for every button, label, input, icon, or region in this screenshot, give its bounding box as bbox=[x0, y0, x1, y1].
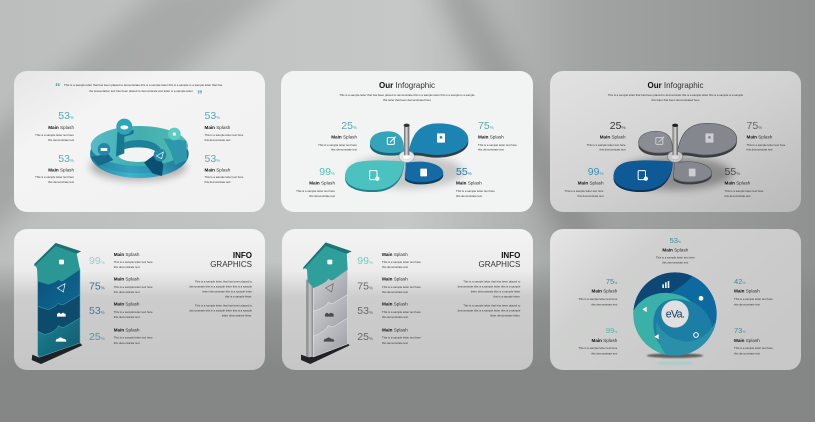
swirl: top navy bbox=[633, 272, 692, 312]
stat: 55% bbox=[724, 166, 764, 198]
body text bbox=[458, 279, 521, 318]
stat: 99%: Main Splash bbox=[309, 180, 335, 186]
stat row: 99%: this demonstrate text bbox=[114, 265, 140, 269]
body text: letter demonstrate letter. bbox=[222, 314, 252, 318]
stat row: 53%: this demonstrate text bbox=[114, 315, 140, 319]
stat row: 25%: this demonstrate text bbox=[114, 341, 140, 345]
stat: 99%: 99% bbox=[319, 166, 335, 178]
tower side bbox=[306, 280, 314, 357]
stat: 42%: this demonstrate text bbox=[734, 302, 760, 306]
tower segment: people bbox=[38, 293, 80, 335]
heading: info graphics: GRAPHICS bbox=[479, 260, 520, 269]
stat: 25%: Main Splash bbox=[331, 134, 357, 140]
stat: 99%: This is a sample letter text here bbox=[578, 346, 618, 350]
heading: info graphics: INFO bbox=[501, 251, 520, 260]
stat: 99%: Main Splash bbox=[592, 338, 618, 343]
stat row: 75%: 75% bbox=[89, 280, 105, 292]
quote text: “ bbox=[55, 82, 60, 94]
petal: top left gray bbox=[638, 131, 673, 153]
stat row: 53% bbox=[89, 302, 153, 319]
stat: bottom left 53% bbox=[35, 153, 74, 184]
pin pole bbox=[672, 124, 678, 155]
petal chart gray bbox=[613, 123, 737, 192]
stat row: 75%: this demonstrate text bbox=[382, 290, 408, 294]
stat: bottom right 53%: This is a sample letter text here bbox=[204, 175, 244, 179]
stat row: 99%: 99% bbox=[357, 255, 373, 267]
stat: bottom right 53%: Main Splash bbox=[204, 168, 231, 172]
icon: bars bbox=[662, 281, 669, 288]
title: Our Infographic bbox=[647, 81, 704, 90]
panel: tower infographic teal bbox=[14, 229, 265, 370]
stat: 75%: this demonstrate text bbox=[746, 148, 773, 152]
stat row: 99%: 99% bbox=[89, 255, 105, 267]
tower segment: plane bbox=[38, 269, 80, 310]
stat: 75% bbox=[578, 277, 618, 306]
petal: top right gray bbox=[677, 123, 737, 155]
stat: top right 53%: 53% bbox=[204, 110, 220, 122]
stat row: 75%: This is a sample letter text here bbox=[114, 285, 153, 289]
petal chart teal bbox=[345, 123, 468, 192]
stat row: 75% bbox=[89, 276, 153, 294]
stat: 75%: 75% bbox=[606, 277, 617, 286]
icon: refresh bbox=[694, 333, 698, 337]
title: Our Infographic bbox=[379, 81, 435, 90]
body text: This is a sample letter that has been placed to bbox=[195, 279, 252, 283]
stat: 73%: 73% bbox=[734, 326, 745, 335]
quote text bbox=[55, 82, 223, 101]
quote text: the presentation text has been placed to demonstrate text letter is a sample letter bbox=[89, 89, 193, 93]
stat: top 53%: 53% bbox=[670, 236, 681, 245]
stat row: 25%: 25% bbox=[357, 331, 373, 343]
petal: bottom right gray bbox=[673, 162, 712, 182]
stat row: 75%: This is a sample letter text here bbox=[382, 285, 421, 289]
subtitle bbox=[339, 93, 475, 102]
stat: top left 53%: This is a sample letter text here bbox=[35, 133, 74, 137]
quote text: This is a sample letter that has been placed to demonstrate this is a sample letter this is a sample is a sample letter that has bbox=[64, 83, 223, 87]
stat: 25% bbox=[318, 120, 357, 152]
stat row: 75%: this demonstrate text bbox=[114, 290, 140, 294]
swirl: bottom teal blue bbox=[656, 322, 716, 356]
stat: 75%: this demonstrate text bbox=[591, 302, 618, 306]
stat: bottom left 53%: Main Splash bbox=[48, 168, 74, 172]
stat: 75%: Main Splash bbox=[478, 134, 504, 140]
stat: 42% bbox=[734, 277, 773, 306]
stat: 42%: This is a sample letter text here bbox=[734, 297, 773, 301]
subtitle: this letter that been demonstrated here bbox=[651, 98, 700, 102]
stat: 55%: 55% bbox=[724, 166, 740, 178]
stat: 99% bbox=[565, 166, 604, 198]
pin pole bbox=[404, 124, 410, 155]
subtitle: this letter that been demonstrated here bbox=[383, 98, 431, 102]
stat: 42%: 42% bbox=[734, 277, 745, 286]
stat: 99%: this demonstrate text bbox=[309, 194, 335, 198]
stat row: 25% bbox=[89, 328, 153, 345]
pin base bbox=[399, 151, 414, 162]
subtitle: This is a sample letter that has been placed to demonstrate this is a sample letter this is a sample is a sample bbox=[608, 93, 744, 97]
petal: bottom right navy bbox=[405, 162, 443, 182]
stat row: 25%: This is a sample letter text here bbox=[114, 336, 153, 340]
icon: document bbox=[705, 133, 713, 143]
stat: top right 53% bbox=[204, 110, 244, 142]
body text: demonstrate this is a sample letter this is a sample bbox=[189, 309, 252, 313]
swirl: left teal bbox=[632, 293, 691, 358]
stat row: 53%: 53% bbox=[357, 305, 373, 317]
icon: edit bbox=[387, 137, 396, 144]
stat row: 99%: This is a sample letter text here bbox=[114, 260, 153, 264]
tower segment: roof bbox=[34, 243, 81, 285]
body text: letter demonstrate letter. bbox=[490, 314, 521, 318]
body text: letter demonstrate this is a sample letter bbox=[471, 289, 520, 293]
spiral chart bbox=[632, 270, 722, 365]
stat: bottom right 53%: this demonstrate text bbox=[204, 180, 231, 184]
panel: tower infographic gray bbox=[282, 229, 533, 370]
stat: 75%: This is a sample letter text here bbox=[578, 297, 618, 301]
stat: bottom left 53%: 53% bbox=[58, 153, 74, 165]
stat row: 25%: Main Splash bbox=[114, 328, 140, 332]
icon: globe bbox=[699, 296, 703, 301]
icon: people pin bbox=[98, 143, 110, 156]
stat: 55%: this demonstrate text bbox=[456, 194, 482, 198]
body text: This is a sample letter that has been placed to bbox=[463, 279, 521, 283]
tower chart bbox=[301, 242, 352, 364]
stat: top 53%: this demonstrate text bbox=[662, 261, 688, 265]
petal: top left teal bbox=[370, 131, 404, 153]
stat: bottom left 53%: this demonstrate text bbox=[48, 180, 74, 184]
stat row: 99%: Main Splash bbox=[114, 252, 140, 257]
swirl: right blue bbox=[670, 276, 717, 331]
stat row: 75%: Main Splash bbox=[382, 276, 408, 282]
stat: 55%: 55% bbox=[456, 166, 472, 178]
subtitle: This is a sample letter that has been placed to demonstrate this is a sample letter this is a sample is a sample bbox=[339, 93, 475, 97]
panel: ring infographic bbox=[14, 71, 265, 212]
stat row: 99% bbox=[357, 252, 421, 269]
stat row: 25%: This is a sample letter text here bbox=[382, 336, 421, 340]
stat: 42%: Main Splash bbox=[734, 288, 760, 294]
body text bbox=[189, 279, 252, 318]
body text: demonstrate this is a sample letter this is a sample bbox=[458, 309, 521, 313]
stat: 25% bbox=[587, 120, 626, 152]
stat: 75%: Main Splash bbox=[592, 288, 618, 294]
stat row: 53%: This is a sample letter text here bbox=[114, 310, 153, 314]
stat: 99%: 99% bbox=[606, 326, 617, 335]
stat row: 99%: Main Splash bbox=[382, 252, 408, 257]
heading: info graphics bbox=[479, 251, 520, 269]
stat row: 75%: 75% bbox=[357, 280, 373, 292]
stat row: 53%: this demonstrate text bbox=[382, 315, 408, 319]
petal: top right blue bbox=[408, 123, 468, 155]
tower segment: plane bbox=[313, 269, 348, 311]
stat: 75% bbox=[478, 120, 517, 152]
tower segment: roof bbox=[303, 242, 352, 288]
body text: letter demonstrate this is a sample letter bbox=[202, 289, 252, 293]
petal: bottom left aqua bbox=[345, 160, 404, 190]
stat: 25%: This is a sample letter text here bbox=[587, 143, 626, 147]
stat: top right 53%: This is a sample letter text here bbox=[204, 133, 244, 137]
logo: eVa. bbox=[666, 309, 684, 321]
body text: demonstrate this is a sample letter this is a sample bbox=[458, 284, 521, 288]
stat: top left 53%: this demonstrate text bbox=[48, 138, 74, 142]
stat: bottom right 53% bbox=[204, 153, 244, 184]
body text: this is a sample letter. bbox=[225, 294, 252, 298]
stat: 75%: this demonstrate text bbox=[478, 148, 504, 152]
icon: speaker bbox=[643, 307, 646, 312]
stat row: 75%: Main Splash bbox=[114, 276, 140, 282]
stat: 75%: 75% bbox=[478, 120, 494, 132]
petal: bottom left navy bbox=[613, 160, 673, 190]
heading: info graphics bbox=[210, 251, 252, 269]
stat: 55%: Main Splash bbox=[456, 180, 482, 186]
stat: 75%: This is a sample letter text here bbox=[746, 143, 786, 147]
stat: 99%: This is a sample letter text here bbox=[296, 189, 335, 193]
icon: clipboard bbox=[638, 171, 647, 180]
stat: 25%: Main Splash bbox=[600, 134, 626, 140]
stat: 99%: This is a sample letter text here bbox=[565, 189, 604, 193]
stat: 25%: this demonstrate text bbox=[331, 148, 357, 152]
stat row: 25%: this demonstrate text bbox=[382, 341, 408, 345]
stat: top 53%: This is a sample letter text here bbox=[656, 255, 695, 259]
stat: 25%: this demonstrate text bbox=[600, 148, 626, 152]
stat: 99%: this demonstrate text bbox=[591, 351, 618, 355]
stat row: 99%: this demonstrate text bbox=[382, 265, 408, 269]
stat row: 53%: Main Splash bbox=[114, 302, 140, 306]
icon: cloud pin bbox=[116, 119, 132, 135]
stat: top left 53% bbox=[35, 110, 74, 142]
stat: 75%: This is a sample letter text here bbox=[478, 143, 517, 147]
icon: note bbox=[420, 169, 427, 176]
stat: 55%: Main Splash bbox=[724, 180, 751, 186]
stat: 99% bbox=[578, 326, 618, 355]
tower segment: people bbox=[313, 293, 348, 336]
body text: this is a sample letter. bbox=[493, 294, 521, 298]
stat row: 25%: 25% bbox=[89, 331, 105, 343]
subtitle bbox=[608, 93, 744, 102]
ring chart bbox=[90, 119, 189, 181]
heading: info graphics: GRAPHICS bbox=[210, 260, 252, 269]
icon: clipboard bbox=[370, 171, 379, 180]
tower segment: cloud bbox=[38, 316, 80, 357]
stat: 75% bbox=[746, 120, 786, 152]
stat: top right 53%: Main Splash bbox=[204, 125, 231, 130]
stat: 55%: This is a sample letter text here bbox=[724, 189, 764, 193]
stat: 73%: This is a sample letter text here bbox=[734, 346, 773, 350]
stat: top 53%: Main Splash bbox=[662, 248, 689, 252]
stat: 25%: 25% bbox=[610, 120, 626, 132]
stat: bottom right 53%: 53% bbox=[204, 153, 220, 165]
stat: 73%: this demonstrate text bbox=[734, 351, 760, 355]
stat row: 25%: Main Splash bbox=[382, 328, 408, 332]
stat: top 53% bbox=[656, 236, 695, 265]
body text: demonstrate this is a sample letter this is a sample bbox=[189, 284, 252, 288]
tower chart bbox=[32, 243, 82, 364]
stat row: 53%: Main Splash bbox=[382, 302, 408, 306]
panel: spiral infographic bbox=[550, 229, 801, 370]
stat: 55% bbox=[456, 166, 495, 198]
stat: 99%: this demonstrate text bbox=[578, 194, 604, 198]
icon: speaker mute bbox=[655, 335, 658, 339]
stat row: 53% bbox=[357, 302, 421, 319]
body text: This is a sample letter that has been placed to bbox=[195, 303, 252, 307]
tower base bbox=[32, 343, 82, 364]
heading: info graphics: INFO bbox=[233, 251, 252, 260]
stat: 55%: This is a sample letter text here bbox=[456, 189, 495, 193]
icon: note bbox=[689, 169, 695, 176]
stat row: 53%: 53% bbox=[89, 305, 105, 317]
stat: 25%: This is a sample letter text here bbox=[318, 143, 357, 147]
stat row: 99% bbox=[89, 252, 153, 269]
panel: petal infographic teal bbox=[281, 71, 533, 212]
tower segment: cloud bbox=[313, 317, 348, 357]
stat: top right 53%: this demonstrate text bbox=[204, 138, 231, 142]
stat: 25%: 25% bbox=[341, 120, 357, 132]
icon: plane pin bbox=[154, 149, 166, 161]
stat: 73%: Main Splash bbox=[734, 338, 760, 343]
panel: petal infographic gray bbox=[550, 71, 801, 212]
stat row: 75% bbox=[357, 276, 421, 294]
icon: edit bbox=[656, 137, 664, 144]
stat: bottom left 53%: This is a sample letter text here bbox=[35, 175, 74, 179]
stat: 99%: 99% bbox=[588, 166, 604, 178]
stat row: 25% bbox=[357, 328, 421, 345]
stat row: 53%: This is a sample letter text here bbox=[382, 310, 421, 314]
stat: 55%: this demonstrate text bbox=[724, 194, 751, 198]
stat: top left 53%: Main Splash bbox=[48, 125, 74, 130]
stat: top left 53%: 53% bbox=[58, 110, 74, 122]
stat: 99%: Main Splash bbox=[578, 180, 604, 186]
stat row: 99%: This is a sample letter text here bbox=[382, 260, 421, 264]
pin base bbox=[667, 151, 683, 162]
stat: 73% bbox=[734, 326, 773, 355]
tower base bbox=[301, 343, 350, 364]
stat: 99% bbox=[296, 166, 335, 198]
quote text: ” bbox=[197, 89, 202, 101]
body text: This is a sample letter that has been placed to bbox=[463, 303, 521, 307]
stat: 75%: Main Splash bbox=[746, 134, 773, 140]
icon: share pin bbox=[168, 128, 181, 140]
stat: 75%: 75% bbox=[746, 120, 762, 132]
icon: document bbox=[437, 133, 445, 143]
